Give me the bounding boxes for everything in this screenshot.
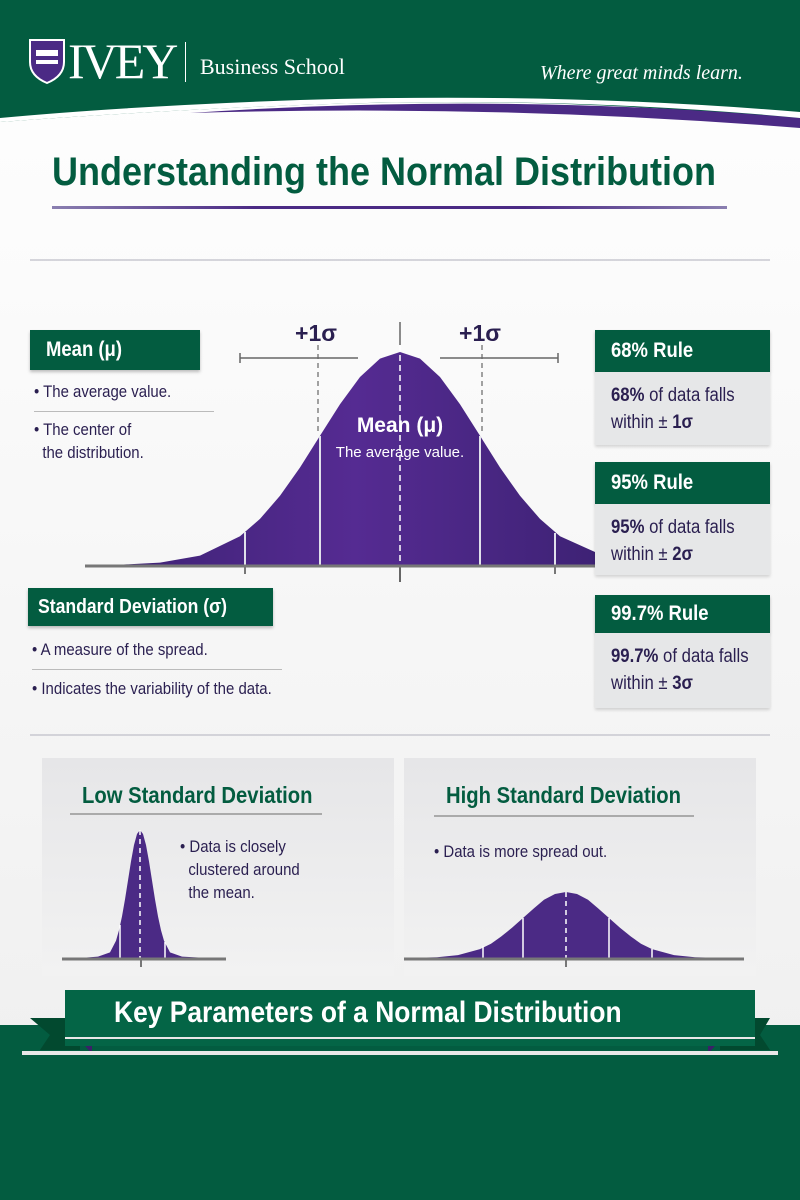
panel: 95% rule bbox=[594, 462, 772, 578]
panel: high standard deviation bbox=[404, 758, 756, 976]
heading: low sd: Low Standard Deviation bbox=[82, 782, 313, 808]
panel: 68% rule bbox=[594, 330, 772, 448]
panel: 95% rule: 95% of data falls bbox=[611, 517, 735, 538]
tagline: Where great minds learn. bbox=[540, 62, 743, 84]
logo bbox=[29, 33, 345, 89]
panel: 95% rule: within ± 2σ bbox=[611, 544, 693, 565]
text: low sd: • Data is closely bbox=[180, 837, 286, 856]
heading: mean bbox=[30, 330, 200, 370]
text: high sd: • Data is more spread out. bbox=[434, 842, 607, 861]
panel: 95% rule: 95% Rule bbox=[611, 471, 693, 494]
bullets: std dev: • Indicates the variability of the data. bbox=[32, 679, 272, 698]
panel: 68% rule: 68% Rule bbox=[611, 339, 693, 362]
banner text: Key Parameters of a Normal Distribution bbox=[114, 996, 622, 1029]
panel: 99.7% rule: within ± 3σ bbox=[611, 673, 693, 694]
text: low sd: the mean. bbox=[188, 883, 255, 902]
ribbon banner bbox=[22, 990, 778, 1055]
text: low sd bbox=[180, 837, 300, 902]
icon: shield bbox=[29, 39, 65, 84]
heading: high sd: High Standard Deviation bbox=[446, 782, 681, 808]
title: Understanding the Normal Distribution bbox=[52, 150, 716, 194]
main bell curve chart: +1σ bbox=[295, 320, 337, 346]
main bell curve chart: The average value. bbox=[336, 444, 464, 461]
bullets: std dev: • A measure of the spread. bbox=[32, 640, 208, 659]
main bell curve chart: +1σ bbox=[459, 320, 501, 346]
panel: 68% rule: within ± 1σ bbox=[611, 412, 693, 433]
main bell curve chart bbox=[85, 320, 595, 582]
heading: std dev bbox=[28, 588, 273, 626]
bullets: mean: • The average value. bbox=[34, 382, 171, 401]
panel: low standard deviation bbox=[42, 758, 394, 976]
chart: wide curve bbox=[404, 892, 744, 967]
logo: Business School bbox=[200, 54, 345, 79]
panel: mean bbox=[28, 330, 214, 462]
heading: mean: Mean (μ) bbox=[46, 338, 122, 361]
bullets: mean: • The center of bbox=[34, 420, 131, 439]
chart: narrow curve bbox=[62, 830, 226, 967]
panel: 99.7% rule: 99.7% of data falls bbox=[611, 646, 749, 667]
panel: 99.7% rule: 99.7% Rule bbox=[611, 602, 709, 625]
panel: 68% rule: 68% of data falls bbox=[611, 385, 735, 406]
panel: 99.7% rule bbox=[594, 595, 772, 711]
bullets: std dev bbox=[32, 640, 282, 698]
heading: std dev: Standard Deviation (σ) bbox=[38, 596, 227, 618]
text: low sd: clustered around bbox=[188, 860, 300, 879]
bullets: mean: the distribution. bbox=[42, 443, 144, 462]
main bell curve chart: Mean (μ) bbox=[357, 414, 443, 437]
bullets: mean bbox=[34, 382, 214, 462]
panel: standard deviation bbox=[26, 588, 282, 698]
logo: IVEY bbox=[68, 33, 175, 89]
title underline bbox=[52, 206, 727, 209]
